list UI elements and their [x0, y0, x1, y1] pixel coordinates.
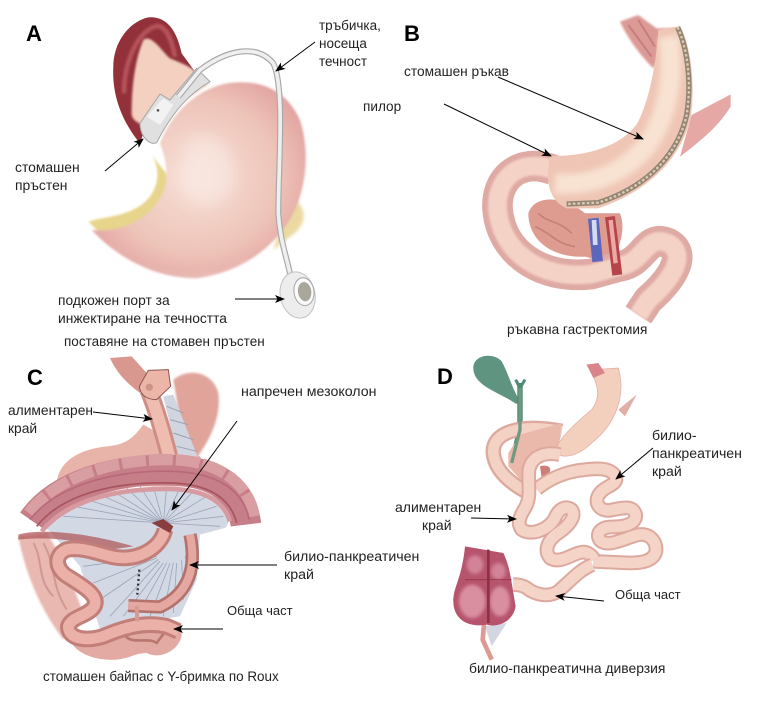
label: sleeve: стомашен ръкав: [404, 64, 509, 79]
biliopancreatic loop: [537, 469, 656, 563]
illustration: diversion: [453, 356, 656, 660]
band: [140, 68, 210, 143]
label: gastric band: стомашен: [15, 159, 80, 175]
mesocolon fan: [40, 488, 229, 630]
arrow: sleeve: [498, 77, 643, 139]
label: biliopancreatic limb: панкреатичен: [652, 445, 742, 461]
label: biliopancreatic limb: край: [652, 463, 682, 479]
label: port: инжектиране на течността: [58, 311, 227, 326]
heading: D: D: [437, 364, 453, 389]
arrow: common: [174, 628, 223, 630]
roux limb upper: [148, 390, 170, 460]
biliopancreatic limb: [128, 535, 192, 607]
stomach: [556, 365, 621, 456]
mesentery strip: [163, 395, 197, 460]
label: alimentary limb: край: [422, 517, 452, 533]
pancreas: [528, 200, 622, 263]
arrow: biliopancreatic: [190, 564, 277, 566]
label: transverse mesocolon: напречен мезоколон: [241, 384, 376, 400]
panel D: biliopancreatic diversion: [395, 356, 742, 676]
lower tube duodenum: [497, 166, 677, 315]
arrow: band: [105, 139, 143, 171]
label: alimentary limb: алиментарен: [8, 403, 93, 418]
arrow: alimentary: [471, 518, 516, 519]
left small bowel: [18, 533, 83, 640]
duodenum: [493, 428, 562, 495]
arrow: tube: [276, 42, 315, 71]
label: tube: тръбичка,: [319, 18, 381, 33]
heading: B: B: [404, 21, 420, 46]
arrow: common: [556, 596, 604, 601]
bottom loops: [67, 621, 182, 660]
panel B: sleeve gastrectomy: [363, 15, 731, 337]
port: [276, 269, 319, 321]
label: pylorus: пилор: [363, 99, 401, 114]
arrow: port: [235, 298, 284, 300]
caption C: стомашен байпас с Y-бримка по Roux: [43, 669, 279, 684]
colon: [33, 470, 246, 525]
artery: [610, 217, 617, 275]
oesophagus: [110, 356, 147, 393]
fat: [88, 155, 177, 233]
alimentary loop: [519, 454, 594, 560]
stomach body: [92, 82, 306, 278]
gallbladder: [473, 356, 521, 404]
panel A: gastric band: [15, 17, 381, 349]
staple line: [567, 27, 689, 204]
caption D: билио-панкреатична диверзия: [469, 660, 665, 676]
label: tube: носеща: [319, 36, 367, 51]
label: tube: течност: [319, 54, 367, 69]
neck of stomach: [132, 39, 210, 127]
vein: [593, 218, 598, 262]
oesophagus muscle: [113, 17, 195, 143]
pancreas: [508, 423, 562, 486]
bottom fade: [97, 257, 257, 290]
heading: C: C: [27, 365, 43, 390]
arrow: alimentary: [93, 412, 152, 419]
oesophagus: [620, 15, 673, 68]
label: biliopancreatic limb: край: [284, 567, 314, 583]
arrow: mesocolon: [172, 421, 237, 510]
illustration: stomach with band: [88, 17, 319, 321]
illustration: bypass: [18, 356, 254, 660]
illustration: sleeve stomach: [497, 15, 731, 315]
sleeve: [548, 26, 693, 208]
label: common channel: Обща част: [227, 603, 293, 618]
label: port: подкожен порт за: [58, 293, 170, 308]
gastric remnant: [173, 373, 219, 458]
label: common channel: Обща част: [615, 587, 681, 602]
mesentery: [485, 623, 507, 646]
arrow: pylorus: [444, 104, 551, 156]
heading: A: A: [26, 21, 42, 46]
omental edge: [18, 532, 133, 550]
tail: [680, 94, 731, 157]
caption A: поставяне на стомавен пръстен: [64, 334, 265, 349]
panel C: Roux-en-Y bypass: [8, 356, 419, 684]
label: biliopancreatic limb: билио-панкреатичен: [284, 549, 419, 565]
roux limb lower: [58, 530, 178, 639]
sutures: [137, 570, 139, 595]
tube: [178, 51, 291, 277]
label: alimentary limb: алиментарен: [395, 499, 481, 515]
label: biliopancreatic limb: билио-: [652, 427, 697, 443]
label: alimentary limb: край: [8, 421, 37, 436]
arrow: biliopancreatic: [616, 448, 653, 479]
common channel: [513, 565, 592, 595]
caecum: [453, 546, 516, 625]
caption B: ръкавна гастректомия: [507, 322, 647, 337]
appendix: [483, 625, 492, 660]
label: gastric band: пръстен: [15, 177, 67, 193]
